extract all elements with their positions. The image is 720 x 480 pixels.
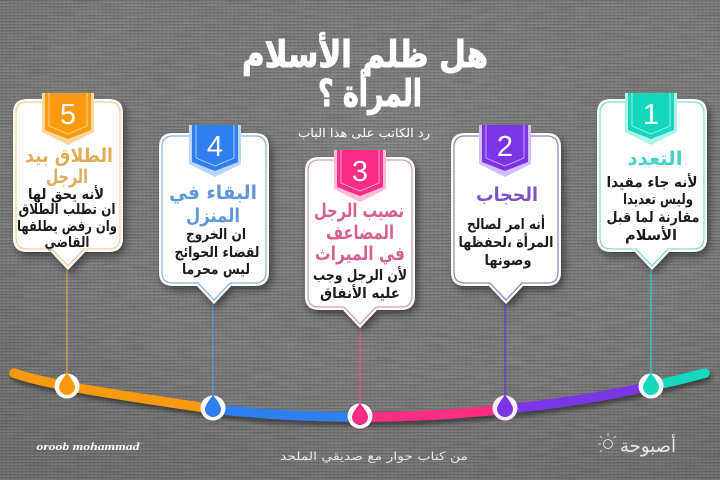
card 3 body: عليه الأنفاق bbox=[320, 284, 400, 302]
panel: card 3 bbox=[305, 150, 415, 328]
timeline node 3 bbox=[348, 403, 372, 428]
badge 2 bbox=[479, 125, 531, 177]
panel: card 1 bbox=[597, 93, 707, 270]
card 5 body: ان تطلب الطلاق bbox=[18, 202, 116, 218]
card 5 heading bbox=[25, 145, 113, 188]
card 1 body: مقارنة لما قبل bbox=[606, 210, 700, 226]
logo: أصبوحة bbox=[620, 434, 676, 457]
card 5 body: القاضي bbox=[44, 235, 90, 251]
card 1 body: الأسلام bbox=[625, 226, 677, 244]
card 4 heading bbox=[169, 182, 257, 227]
card 5 body bbox=[17, 185, 117, 251]
card 5 body: وان رفض يطلقها bbox=[17, 219, 117, 235]
card 4 shape bbox=[159, 133, 269, 304]
badge 4: 4 bbox=[207, 131, 223, 163]
card 4 heading: البقاء في bbox=[169, 182, 257, 204]
title bbox=[242, 31, 488, 115]
card 3 body: لأن الرجل وجب bbox=[313, 266, 407, 284]
card 4 body bbox=[174, 227, 260, 278]
card 1 body: لأنه جاء مقيدا bbox=[606, 173, 698, 191]
card 2 heading: الحجاب bbox=[476, 184, 538, 206]
card 2 body: أنه امر لصالح bbox=[467, 215, 545, 233]
card 5 heading: الطلاق بيد bbox=[25, 145, 113, 167]
panel: card 5 bbox=[13, 93, 123, 270]
card 2 shape bbox=[451, 133, 561, 304]
card 5 shape bbox=[13, 99, 123, 270]
badge 3: 3 bbox=[352, 156, 368, 188]
subtitle: رد الكاتب على هذا الباب bbox=[298, 126, 430, 141]
timeline node 1 bbox=[638, 373, 664, 398]
badge 3 bbox=[334, 150, 386, 202]
card 3 heading: المضاعف bbox=[326, 222, 394, 244]
card 4 body: ان الخروج bbox=[186, 227, 246, 243]
badge 5: 5 bbox=[60, 99, 76, 131]
card 2 body: وصونها bbox=[484, 253, 532, 269]
title: المرأة ؟ bbox=[318, 69, 422, 115]
card 5 heading: الرجل bbox=[46, 166, 88, 188]
card 3 heading: في الميراث bbox=[315, 243, 405, 265]
timeline node 4 bbox=[200, 395, 226, 420]
card 4 body: لقضاء الحوائج bbox=[174, 245, 260, 261]
card 3 heading: نصيب الرجل bbox=[314, 200, 404, 222]
badge 1: 1 bbox=[643, 99, 659, 131]
badge 2: 2 bbox=[497, 131, 513, 163]
footer source: من كتاب حوار مع صديقي الملحد bbox=[280, 449, 468, 464]
badge 1 bbox=[625, 93, 677, 145]
card 4 heading: المنزل bbox=[186, 205, 240, 227]
timeline bbox=[14, 373, 705, 417]
card 3 body bbox=[313, 266, 407, 302]
card 1 body: وليس تعديدا bbox=[623, 192, 693, 208]
card 1 heading: التعدد bbox=[628, 148, 682, 170]
panel: card 2 bbox=[451, 125, 561, 304]
card 2 body bbox=[458, 215, 554, 269]
card 1 shape bbox=[597, 99, 707, 270]
connector lines bbox=[67, 268, 651, 410]
title: هل ظلم الأسلام bbox=[242, 31, 488, 77]
card 2 body: المرأة ،لحفظها bbox=[458, 233, 554, 251]
timeline node 5 bbox=[54, 373, 80, 398]
timeline node 2 bbox=[492, 395, 518, 420]
credit: oroob mohammad bbox=[36, 442, 140, 453]
card 4 body: ليس محرما bbox=[182, 262, 250, 278]
card 3 heading bbox=[314, 200, 405, 265]
badge 5 bbox=[42, 93, 94, 145]
card 5 body: لأنه يحق لها bbox=[28, 185, 104, 203]
badge 4 bbox=[189, 125, 241, 177]
logo bbox=[598, 433, 676, 457]
panel: card 4 bbox=[159, 125, 269, 304]
card 1 body bbox=[606, 173, 700, 244]
card 3 shape bbox=[305, 157, 415, 328]
